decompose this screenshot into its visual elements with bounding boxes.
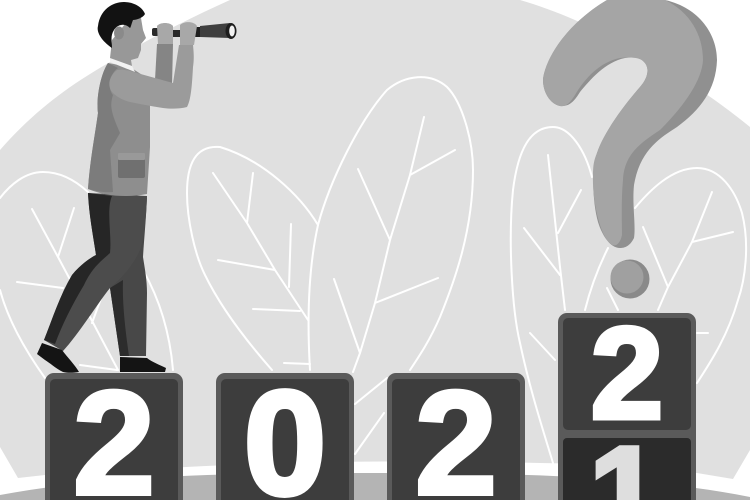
block: 2 (45, 361, 183, 500)
hands (157, 22, 197, 45)
dot highlight (610, 260, 644, 294)
block: 2 (387, 361, 525, 500)
leaf second (187, 147, 318, 370)
neck and face (110, 18, 146, 66)
leaf right back (511, 127, 592, 463)
front shoe (37, 343, 79, 373)
front leg (44, 193, 147, 351)
man (37, 2, 236, 373)
leg shadow (44, 193, 112, 344)
hair (98, 2, 145, 48)
back leg shadow (110, 280, 129, 356)
rear shoe (120, 357, 166, 372)
leaf left (0, 172, 173, 378)
ground (0, 473, 750, 500)
back leg (110, 197, 147, 356)
spyglass (152, 23, 236, 39)
leaf right front (585, 168, 746, 383)
near arm (109, 45, 194, 109)
pocket flap (118, 153, 145, 160)
jacket (88, 63, 150, 196)
block: flip counter: 2 (591, 300, 663, 446)
block: 0 (216, 361, 354, 500)
far arm (155, 44, 173, 86)
leaf large (309, 77, 473, 454)
question mark body (543, 0, 703, 245)
dot (610, 260, 650, 298)
block: flip counter (558, 300, 696, 500)
question mark shadow (543, 0, 717, 248)
ear (114, 26, 124, 40)
jacket side shade (88, 63, 120, 192)
shirt collar (110, 57, 135, 72)
pocket (118, 156, 145, 178)
question mark (543, 0, 717, 298)
